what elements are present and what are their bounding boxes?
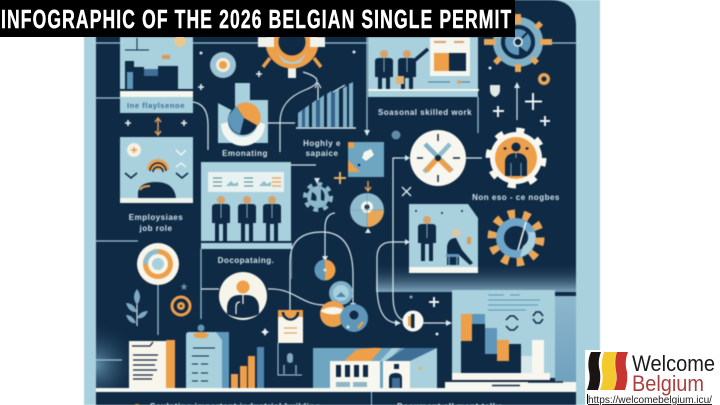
icon: orange plus xyxy=(334,172,346,184)
icon: top gear xyxy=(258,22,325,78)
label: Highly e sapaice: Hoghly e xyxy=(303,139,341,148)
icon: small star xyxy=(180,283,188,290)
panel: pie chart card xyxy=(218,83,268,146)
icon: plus group xyxy=(429,93,550,307)
icon: small cog xyxy=(392,130,400,140)
icon: globe gear xyxy=(484,14,552,72)
label: Ine flaylsenoe xyxy=(127,101,185,110)
icon: node circle xyxy=(402,310,424,332)
illustration xyxy=(84,0,600,405)
icon: target circle xyxy=(137,243,179,285)
icon: person gear xyxy=(489,131,543,185)
icon: notepad xyxy=(278,310,303,343)
panel: lower right chart xyxy=(445,290,576,388)
decoration: sparkles xyxy=(125,71,262,126)
lighter lower band xyxy=(376,262,576,292)
icon: light gear xyxy=(305,184,331,210)
logo: Welcome Belgium xyxy=(585,350,720,405)
panel: centre team card xyxy=(201,162,292,279)
label: Employers job role: Employsiaes xyxy=(129,213,183,222)
icon: flag stripes xyxy=(587,352,628,390)
label: Docopataing: Docopataing. xyxy=(218,256,274,265)
icon: double arrow xyxy=(155,118,161,135)
icon: cross xyxy=(402,187,411,196)
icon: plant xyxy=(126,289,148,326)
label: Seasonal skilled work: Soasonal skilled work xyxy=(378,108,472,117)
bar chart: orange bars xyxy=(231,347,264,388)
label: Highly e sapaice xyxy=(303,139,341,158)
panel: desk scene xyxy=(409,204,478,273)
chart lines xyxy=(488,295,540,310)
logo: Welcome Belgium: Belgium xyxy=(632,371,704,396)
panel: top-left tower card xyxy=(120,35,193,113)
panel: small map tile xyxy=(348,142,384,177)
bar chart xyxy=(296,82,356,128)
stepped bars xyxy=(461,314,544,373)
left edge shading xyxy=(96,310,146,388)
icon: shield xyxy=(490,85,500,97)
arrow: orange down xyxy=(365,181,371,191)
label: Employers job role xyxy=(129,213,183,233)
illustration: buildings xyxy=(313,348,437,388)
panel: seasonal work card xyxy=(368,37,479,97)
label: Non eso ce nogbes: Non eso - ce nogbes xyxy=(472,193,560,202)
icon: diamond spark xyxy=(261,328,269,336)
icon: clipboard xyxy=(186,324,229,388)
icon: segmented disc xyxy=(350,193,384,227)
marks xyxy=(506,312,543,330)
icon: round badge xyxy=(210,52,236,78)
icon: person in circle xyxy=(219,272,267,320)
icon: outlined figure xyxy=(278,343,302,375)
icon: orange gear xyxy=(492,214,540,262)
panel: employers job role card xyxy=(120,137,193,203)
dark board xyxy=(96,0,576,405)
icon: document xyxy=(129,340,175,388)
connector lines xyxy=(96,37,576,360)
bullet xyxy=(132,404,142,405)
icon: orange coin xyxy=(538,73,550,85)
label: Employers job role: job role xyxy=(139,224,172,233)
icon: half disc xyxy=(314,260,336,280)
icon: orb cluster xyxy=(320,281,368,332)
label: Highly e sapaice: sapaice xyxy=(306,149,338,158)
decoration: dots xyxy=(200,50,492,336)
bottom rule xyxy=(96,388,576,392)
label: Emonating: Emonating xyxy=(222,149,268,158)
arrowheads xyxy=(314,82,520,326)
icon: orange target xyxy=(172,297,190,315)
title banner: INFOGRAPHIC OF THE 2026 BELGIAN SINGLE PERMIT xyxy=(1,5,512,34)
icon: clock dial xyxy=(410,130,466,186)
column divider xyxy=(371,392,372,405)
outer light frame xyxy=(84,0,600,405)
